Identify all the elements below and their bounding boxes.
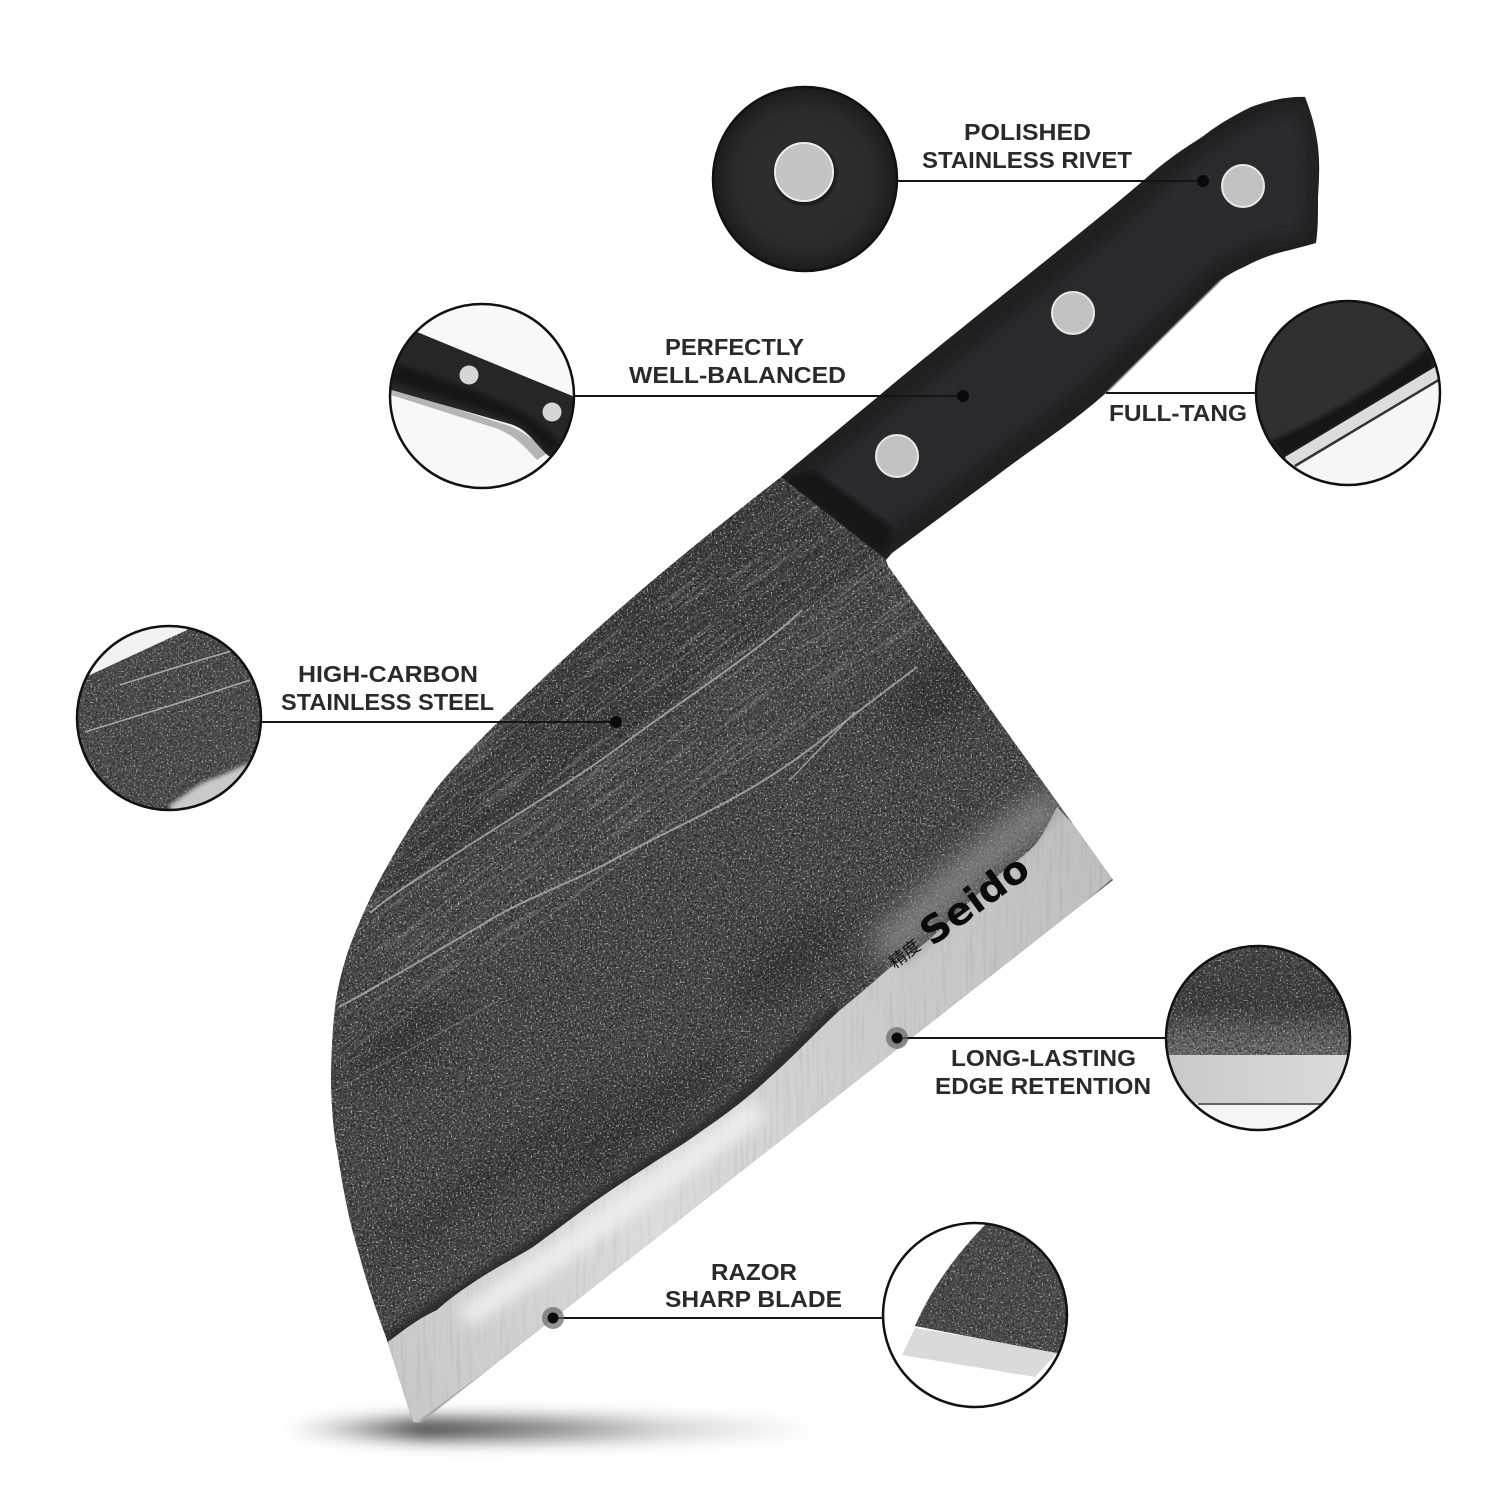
leader line and dot — [897, 175, 1209, 187]
label: FULL-TANG — [1109, 400, 1247, 426]
label: POLISHED — [964, 119, 1091, 145]
blade — [224, 371, 1125, 1440]
label: WELL-BALANCED — [629, 362, 846, 388]
rivets on handle — [876, 165, 1264, 477]
cleaver knife — [224, 90, 1330, 1440]
icon: steel detail circle — [70, 620, 262, 815]
label: STAINLESS STEEL — [281, 689, 494, 715]
leader line and dot — [542, 1307, 883, 1329]
callout: razor sharp blade — [542, 1220, 1073, 1407]
hardened steel edge — [388, 807, 1125, 1440]
icon: handle detail circle — [380, 304, 578, 488]
label: EDGE RETENTION — [935, 1073, 1151, 1099]
callout: high-carbon stainless steel — [70, 620, 622, 815]
label: STAINLESS RIVET — [922, 147, 1132, 173]
leader line and dot — [886, 1027, 1166, 1049]
label: RAZOR — [711, 1259, 797, 1285]
label — [935, 1045, 1151, 1099]
label: PERFECTLY — [665, 334, 804, 360]
logo on blade: 精度 — [886, 936, 924, 972]
icon: blade tip detail circle — [883, 1220, 1073, 1407]
callout: full-tang — [1106, 295, 1445, 485]
callout: polished stainless rivet — [713, 87, 1209, 271]
label — [922, 119, 1132, 173]
label: LONG-LASTING — [951, 1045, 1136, 1071]
label — [629, 334, 846, 388]
leader line and dot — [574, 390, 969, 402]
leader line and dot — [261, 716, 622, 728]
ground shadow — [280, 1417, 830, 1441]
callout: perfectly well-balanced — [380, 304, 969, 488]
edge fade behind logo — [880, 800, 1060, 955]
icon: rivet detail circle — [713, 87, 897, 271]
icon: tang detail circle — [1250, 295, 1445, 485]
label — [281, 661, 494, 715]
logo on blade — [886, 846, 1038, 972]
label: SHARP BLADE — [665, 1286, 842, 1312]
leader line — [1106, 392, 1256, 394]
handle — [770, 90, 1330, 570]
icon: edge detail circle — [1166, 946, 1350, 1133]
logo on blade: Seido — [911, 846, 1038, 954]
label: HIGH-CARBON — [298, 661, 478, 687]
callout: long-lasting edge retention — [886, 946, 1350, 1133]
label — [665, 1259, 842, 1312]
